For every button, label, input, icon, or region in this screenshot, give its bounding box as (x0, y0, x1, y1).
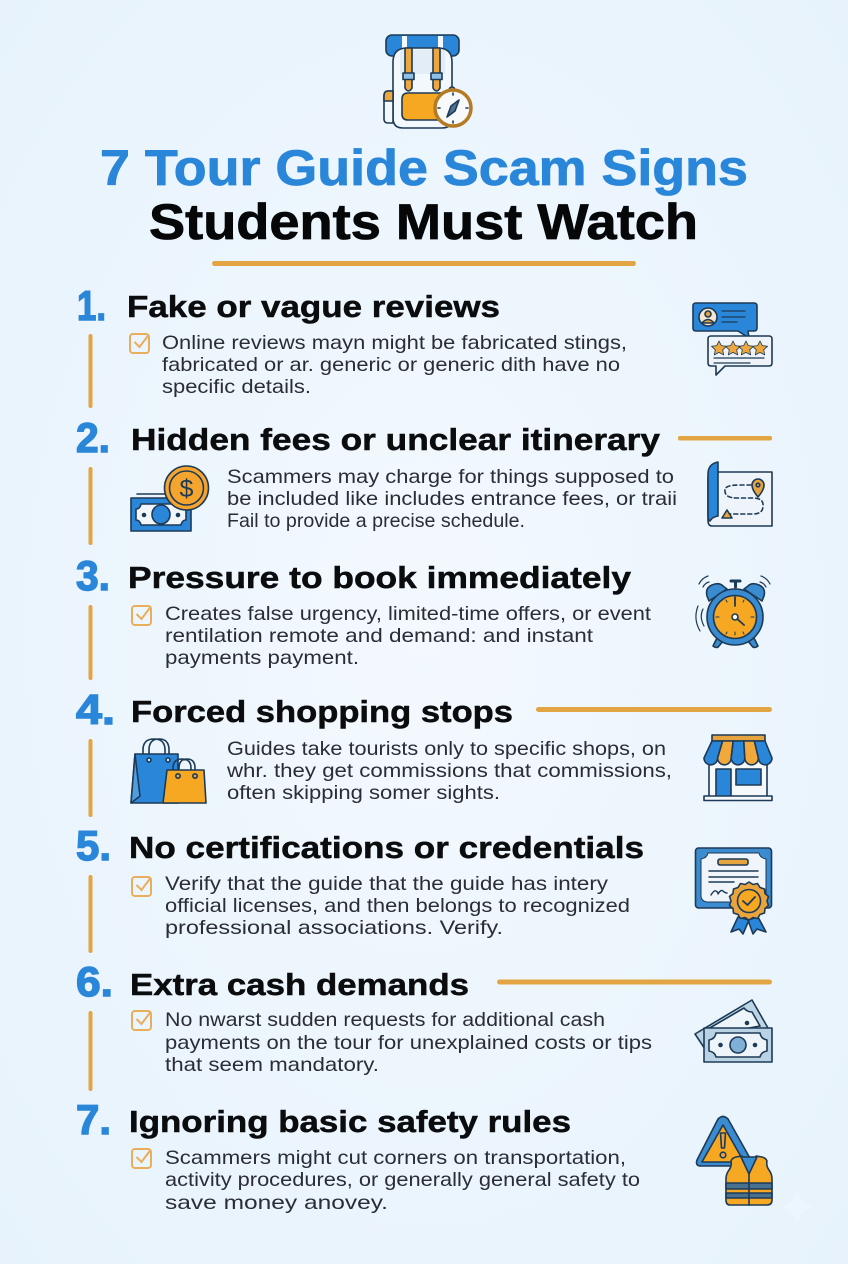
title: 7 Tour Guide Scam Signs (100, 140, 748, 196)
title (100, 140, 748, 250)
body text 1: Online reviews mayn might be fabricated stings, (162, 332, 627, 354)
heading 2: Hidden fees or unclear itinerary (131, 422, 661, 457)
body text 2: Fail to provide a precise schedule. (227, 510, 525, 532)
timeline bar 5 (88, 875, 92, 953)
panel: sign 6 (76, 958, 772, 1091)
body text 5: official licenses, and then belongs to recognized (165, 895, 630, 917)
icon: checkbox 5 (132, 877, 151, 896)
heading 3: Pressure to book immediately (128, 560, 632, 595)
icon: itinerary map (708, 462, 772, 526)
body text 3: payments payment. (165, 647, 359, 669)
panel: sign 4 (76, 686, 772, 817)
body text 5: professional associations. Verify. (165, 917, 503, 939)
body text 5 (165, 873, 630, 939)
number 7: 7. (76, 1096, 111, 1143)
number 6: 6. (76, 958, 113, 1005)
timeline bar 6 (88, 1011, 92, 1091)
panel: sign 7 (76, 1096, 772, 1214)
icon: cash stack (695, 1000, 772, 1062)
body text 1: specific details. (162, 376, 311, 398)
body text 6: No nwarst sudden requests for additional cash (165, 1009, 605, 1031)
panel: sign 1 (77, 282, 772, 408)
heading 5: No certifications or credentials (129, 830, 644, 865)
icon: review bubbles (693, 303, 772, 375)
body text 6: payments on the tour for unexplained costs or tips (165, 1032, 652, 1054)
body text 4: often skipping somer sights. (227, 782, 500, 804)
timeline bar 3 (88, 605, 92, 680)
title: Students Must Watch (149, 194, 698, 250)
heading 7: Ignoring basic safety rules (129, 1104, 571, 1139)
timeline bar 4 (88, 739, 92, 817)
icon: banknote and coin (131, 466, 208, 531)
icon: checkbox 6 (132, 1011, 151, 1030)
body text 6 (165, 1009, 652, 1076)
icon: checkbox 7 (132, 1149, 151, 1168)
heading rule 2 (678, 436, 772, 440)
body text 3: rentilation remote and demand: and instant (165, 625, 594, 647)
body text 7: save money anovey. (165, 1192, 388, 1214)
body text 6: that seem mandatory. (165, 1054, 379, 1076)
number 1: 1. (77, 282, 106, 329)
number 4: 4. (76, 686, 115, 733)
body text 2: be included like includes entrance fees, or traii (227, 488, 677, 510)
body text 4: whr. they get commissions that commissions, (226, 760, 672, 782)
panel: sign 2 (76, 414, 772, 545)
number 3: 3. (76, 552, 110, 599)
title underline (212, 261, 636, 266)
number 2: 2. (76, 414, 110, 461)
icon: backpack with compass (384, 35, 471, 128)
timeline bar 2 (88, 467, 92, 545)
icon: shopping bags (131, 739, 206, 803)
icon: checkbox 1 (130, 334, 149, 353)
body text 3 (165, 603, 652, 669)
icon: alarm clock (696, 576, 770, 648)
icon: banknote and coin: $ (180, 475, 194, 503)
icon: checkbox 3 (132, 606, 151, 625)
panel: sign 3 (76, 552, 770, 680)
heading rule 4 (536, 707, 772, 712)
body text 4: Guides take tourists only to specific shops, on (227, 738, 666, 760)
body text 1: fabricated or ar. generic or generic dith have no (162, 354, 620, 376)
icon: storefront (704, 735, 772, 800)
heading rule 6 (497, 980, 772, 984)
body text 7: activity procedures, or generally general safety to (165, 1169, 640, 1191)
body text 2: Scammers may charge for things supposed to (227, 466, 674, 488)
number 5: 5. (76, 822, 111, 869)
body text 1 (162, 332, 627, 398)
heading 4: Forced shopping stops (131, 694, 513, 729)
body text 7 (165, 1147, 640, 1214)
heading 6: Extra cash demands (130, 967, 469, 1002)
body text 5: Verify that the guide that the guide has intery (165, 873, 608, 895)
body text 2 (227, 466, 677, 532)
icon: certificate with rosette (696, 848, 772, 934)
body text 3: Creates false urgency, limited-time offers, or event (165, 603, 652, 625)
timeline bar 1 (88, 334, 92, 408)
body text 4 (226, 738, 672, 804)
panel: sign 5 (76, 822, 772, 953)
icon: warning sign and safety vest (696, 1116, 772, 1205)
heading 1: Fake or vague reviews (127, 289, 500, 324)
body text 7: Scammers might cut corners on transportation, (165, 1147, 626, 1169)
